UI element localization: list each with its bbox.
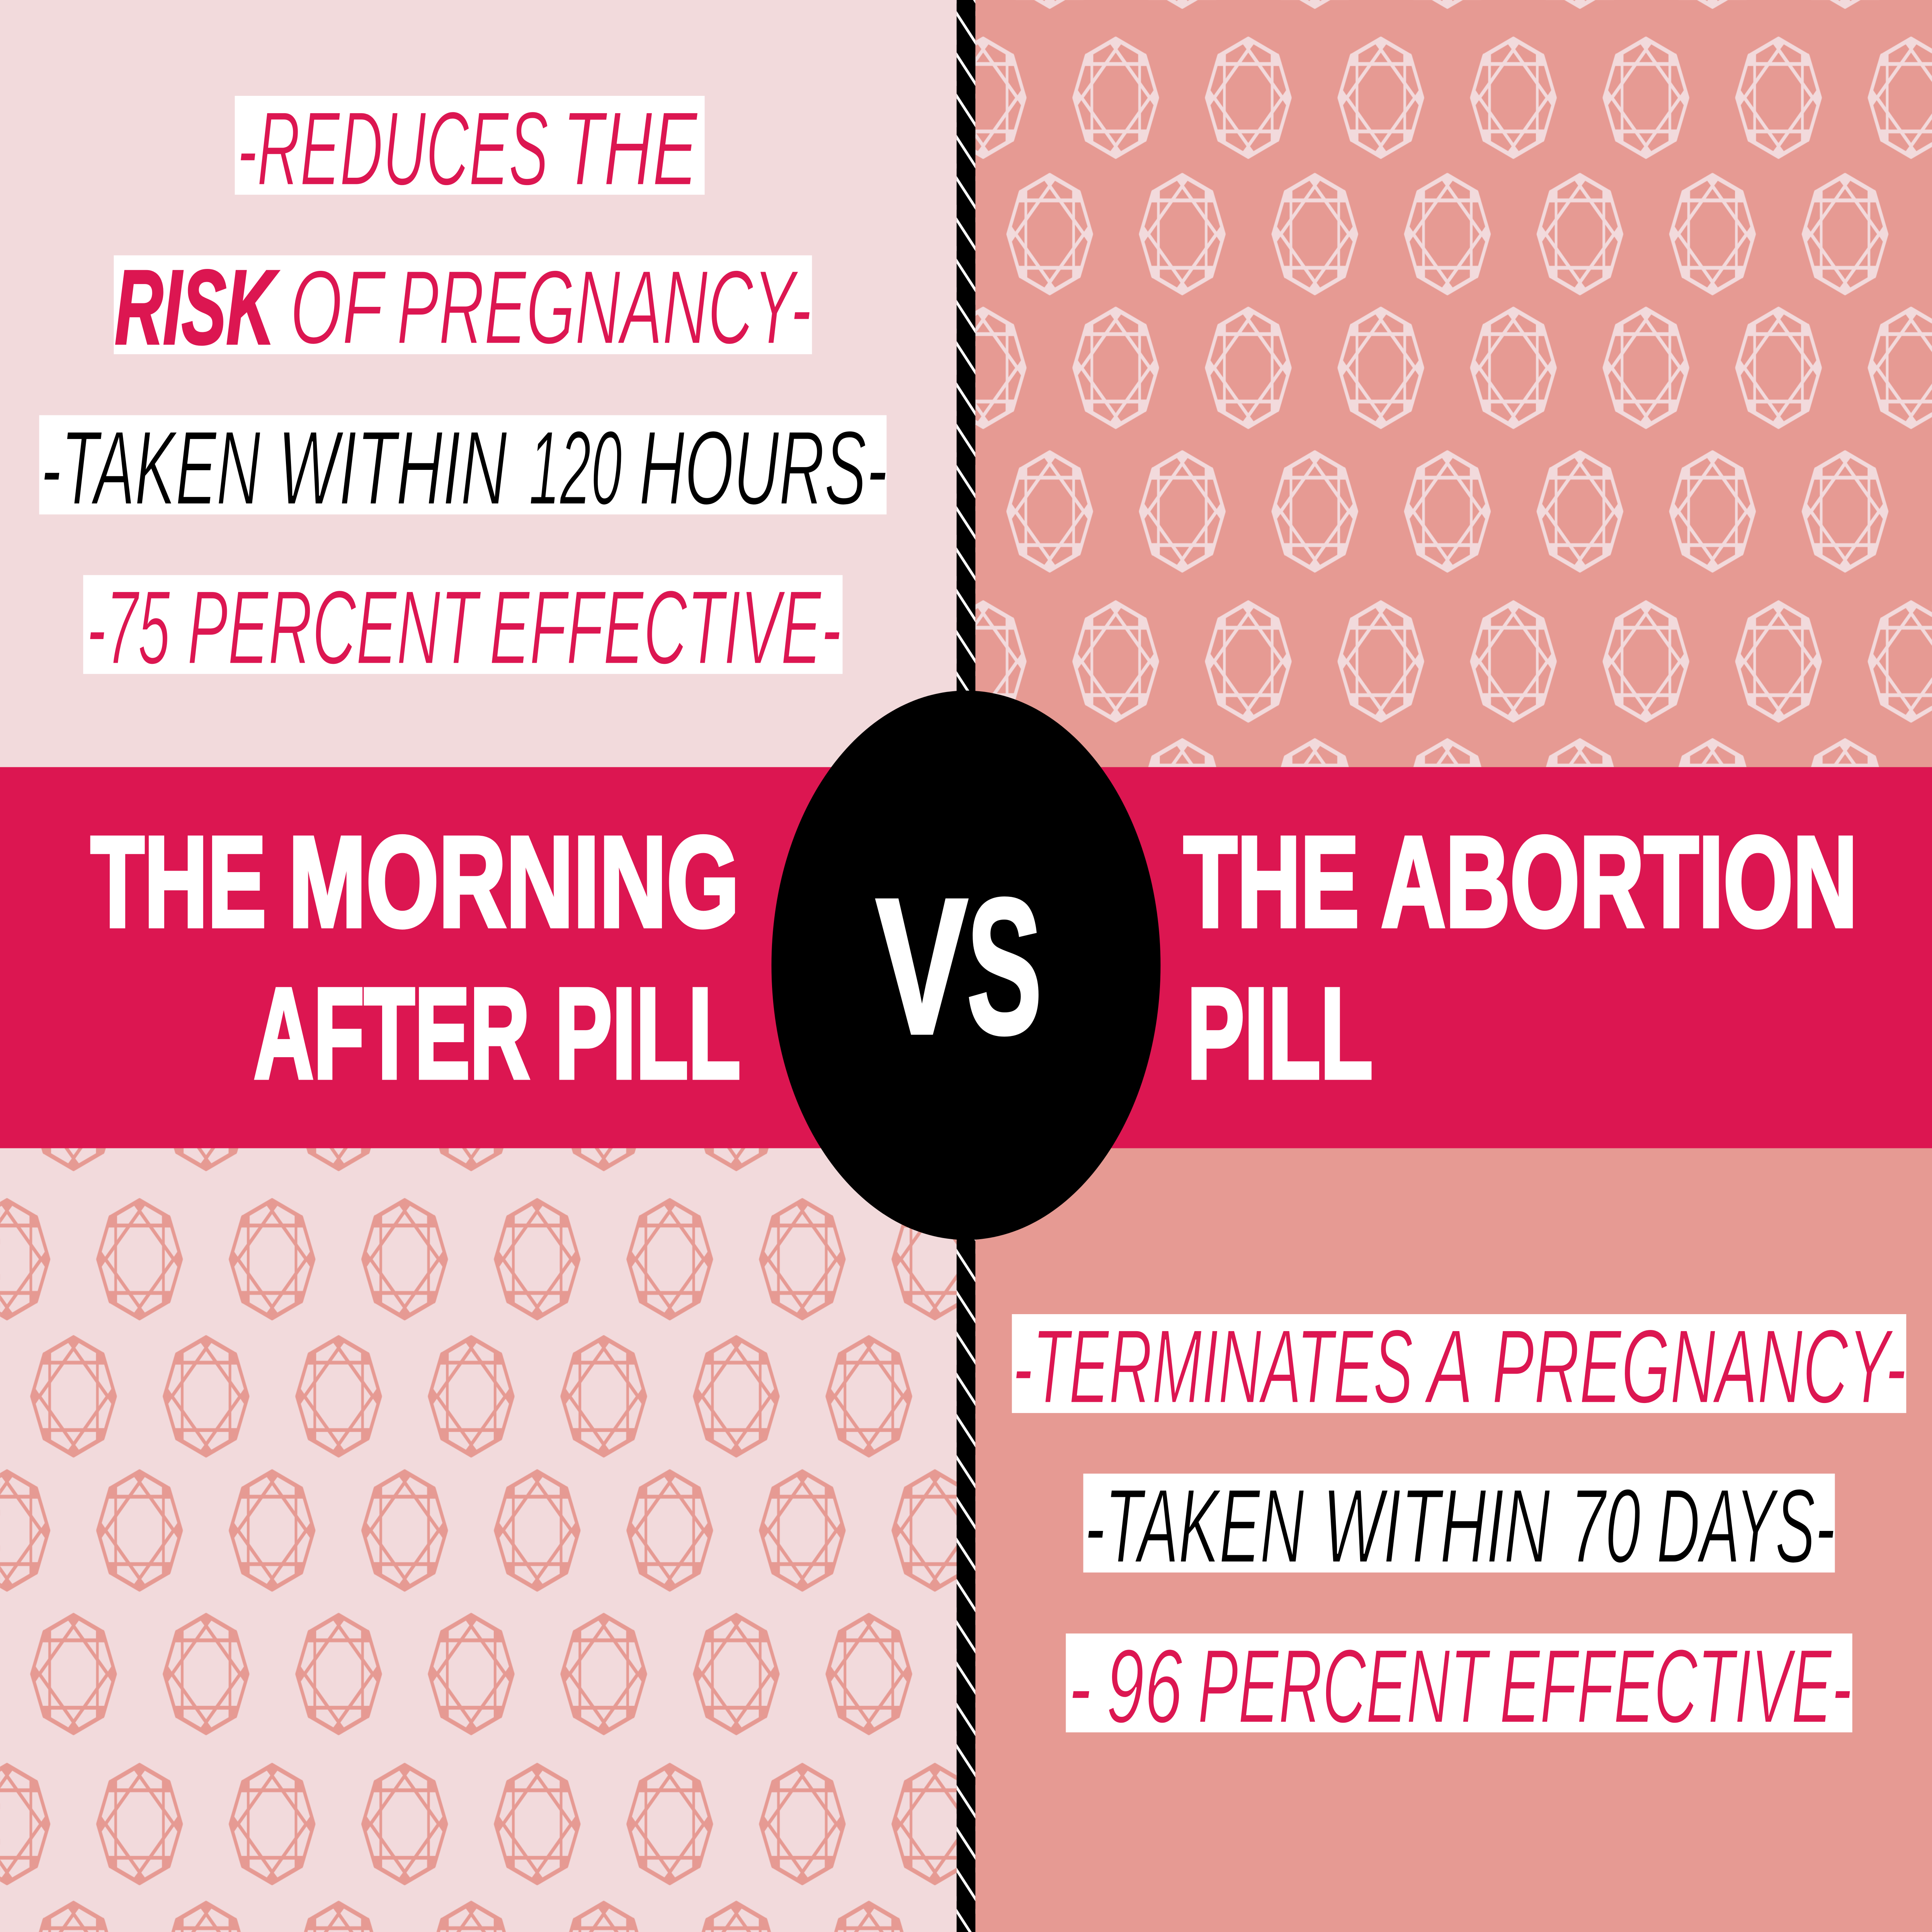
text block: terminates a pregnancy: -TERMINATES [1013,1308,1413,1425]
text block: 75 percent effective [83,569,843,687]
text block: 75 percent effective: EFFECTIVE- [490,569,841,687]
gem pattern: bottom left [0,1148,957,1932]
badge: black VS circle: S [967,858,1042,1074]
heading: The Morning After Pill: MORNING [289,810,739,954]
text block: 96 percent effective: PERCENT [1198,1628,1491,1745]
text block: risk of pregnancy: OF [290,248,386,366]
text block: taken within 70 days: 70 [1570,1467,1641,1585]
heading: The Morning After Pill: PILL [555,962,741,1105]
heading: The Morning After Pill: THE [91,810,266,954]
text block: taken within 70 days: -TAKEN [1085,1467,1304,1585]
badge: black VS circle [772,690,1160,1240]
text block: 75 percent effective: PERCENT [187,569,481,687]
text block: taken within 120 hours: WITHIN [278,409,507,527]
text block: 96 percent effective: EFFECTIVE- [1500,1628,1852,1745]
text block: 75 percent effective: -75 [87,569,170,687]
text block: risk of pregnancy [114,248,812,366]
heading: The Abortion Pill: ABORTION [1381,810,1857,954]
text block: reduces the: THE [563,90,698,207]
heading: The Morning After Pill: AFTER [254,962,530,1105]
text block: 96 percent effective: - [1068,1628,1091,1745]
gem pattern: top right [975,0,1932,767]
text block: terminates a pregnancy: A [1424,1308,1473,1425]
text block: reduces the: -REDUCES [237,90,548,207]
text block: taken within 70 days [1083,1467,1835,1585]
text block: taken within 70 days: WITHIN [1323,1467,1550,1585]
heading: The Abortion Pill: THE [1184,810,1359,954]
text block: taken within 120 hours: HOURS- [639,409,888,527]
heading: The Morning After Pill [91,810,741,1105]
text block: 96 percent effective [1066,1628,1852,1745]
text block: taken within 120 hours [39,409,888,527]
text block: terminates a pregnancy [1012,1308,1906,1425]
text block: taken within 120 hours: -TAKEN [41,409,261,527]
panel: right background [975,0,1932,1932]
text block: taken within 70 days: DAYS- [1656,1467,1835,1585]
heading: The Abortion Pill: PILL [1187,962,1373,1105]
text block: 96 percent effective: 96 [1106,1628,1183,1745]
text block: taken within 120 hours: 120 [529,409,622,527]
panel: left background [0,0,957,1932]
text block: risk of pregnancy: PREGNANCY- [397,248,811,366]
heading: The Abortion Pill [1184,810,1857,1105]
divider: striped vertical strip [957,0,975,1932]
text block: risk of pregnancy: RISK [115,248,279,366]
banner: crimson band [0,767,1932,1148]
badge: black VS circle: V [876,858,969,1074]
